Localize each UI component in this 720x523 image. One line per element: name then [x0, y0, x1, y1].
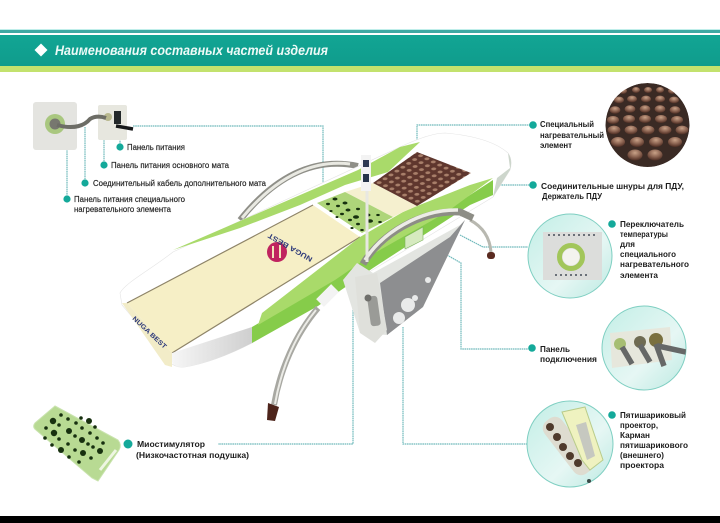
label: power panel: Панель питания	[127, 143, 185, 152]
callout: five-ball projector: пятишарикового	[620, 440, 688, 450]
low frequency pad on bed	[317, 192, 393, 233]
callout: myostimulator pad: (Низкочастотная подушка)	[136, 450, 249, 460]
bed body	[120, 133, 511, 367]
callout: temperature switch: нагревательного	[620, 259, 689, 269]
callout: five-ball projector	[527, 401, 688, 487]
label: heating element power panel: нагревательного элемента	[74, 205, 172, 214]
labels: power panels	[63, 143, 267, 214]
bed logo: NUGA BEST	[266, 231, 314, 262]
bed logo	[266, 231, 314, 262]
label: main mat power panel: Панель питания основного мата	[111, 161, 230, 170]
mat front face	[122, 303, 172, 367]
near front leg	[267, 288, 335, 421]
callout: temperature switch: Переключатель	[620, 219, 684, 229]
callout: five-ball projector: проектора	[620, 460, 664, 470]
remote control and cord	[361, 155, 371, 262]
header banner	[0, 29, 720, 72]
heating element on bed	[373, 152, 471, 206]
bottom black bar	[0, 516, 720, 523]
callout: remote cords and holder: Держатель ПДУ	[542, 191, 603, 201]
callout: special heating element: элемент	[540, 140, 572, 150]
callout: special heating element: Специальный	[540, 119, 594, 129]
callout: special heating element: нагревательный	[540, 130, 604, 140]
connector lines	[67, 125, 530, 444]
power panels illustration	[33, 102, 133, 150]
near green flank	[252, 180, 493, 343]
title: Наименования составных частей изделия	[55, 42, 328, 58]
photo: heating stones	[606, 83, 690, 167]
callout: connection panel: подключения	[540, 354, 597, 364]
near handle	[363, 212, 473, 264]
front cap	[172, 327, 252, 367]
callout: temperature switch	[528, 214, 689, 298]
photo: connection panel	[610, 327, 686, 368]
front brand: NUGA BEST	[131, 315, 168, 350]
back leg	[470, 220, 491, 252]
callout: temperature switch: температуры	[620, 229, 668, 239]
centre cream patch	[345, 183, 417, 217]
icon: low frequency pad	[34, 406, 120, 481]
callout: connection panel: Панель	[540, 344, 570, 354]
callout: connection panel	[528, 306, 686, 390]
callout: five-ball projector: проектор,	[620, 420, 658, 430]
icon: projector and pocket	[539, 407, 603, 483]
label: heating element power panel: Панель питания специального	[74, 195, 186, 204]
callout: five-ball projector: Пятишариковый	[620, 410, 686, 420]
callout: temperature switch: элемента	[620, 270, 658, 280]
control box panel	[343, 220, 465, 343]
far green rail	[173, 142, 420, 250]
icon: diamond bullet	[34, 44, 48, 56]
callout: special heating element	[529, 83, 690, 167]
near green top band	[258, 178, 493, 325]
callout: remote cords and holder: Соединительные шнуры для ПДУ,	[541, 181, 684, 191]
icon: switch panel	[543, 232, 602, 280]
label: heating element power panel	[63, 195, 186, 214]
callout: myostimulator pad	[34, 406, 249, 481]
callout: five-ball projector: (внешнего)	[620, 450, 664, 460]
callout: temperature switch: специального	[620, 249, 676, 259]
label: extra mat cable: Соединительный кабель дополнительного мата	[93, 179, 267, 188]
callout: temperature switch: для	[620, 239, 635, 249]
cream mat	[127, 205, 360, 353]
far handle	[240, 164, 358, 220]
callout: five-ball projector: Карман	[620, 430, 650, 440]
massage bed	[120, 133, 511, 421]
callout: remote cords and holder	[529, 181, 684, 201]
head grey edge	[493, 153, 511, 197]
callout: myostimulator pad: Миостимулятор	[137, 439, 205, 449]
